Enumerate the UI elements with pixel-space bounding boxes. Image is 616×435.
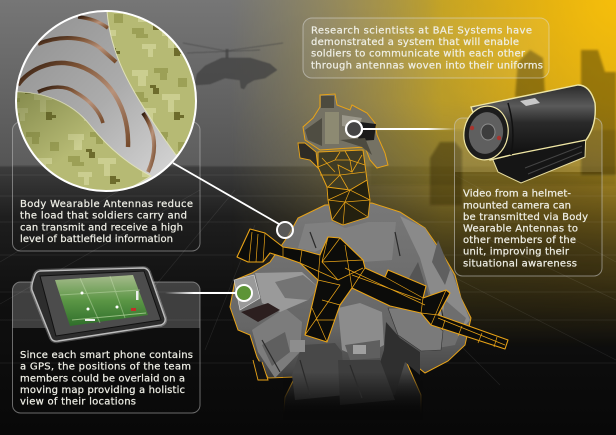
camera [460, 85, 595, 183]
neck mesh [327, 180, 370, 225]
panel: smart phone: moving map providing a holistic [20, 385, 185, 396]
panel: body wearable antennas [12, 122, 200, 251]
ear and chin strap [298, 143, 318, 168]
panel: helmet camera: Wearable Antennas to [463, 223, 578, 234]
panel: helmet camera: unit, improving their [463, 247, 570, 258]
phone on soldier's arm [234, 275, 260, 310]
glove knuckles [275, 275, 318, 300]
panel: helmet camera: other members of the [463, 235, 576, 246]
panel: body wearable antennas: Body Wearable Antennas reduce [20, 199, 193, 210]
panel: smart phone: members could be overlaid on a [20, 373, 185, 384]
helicopter silhouette [183, 43, 283, 89]
camera barrel [471, 85, 595, 160]
rifle silhouette [237, 229, 508, 349]
camouflage flap: lower left [17, 92, 152, 190]
vest and pouch details [252, 216, 470, 420]
panel: top intro: Research scientists at BAE Systems have [311, 25, 532, 36]
camera mount [493, 130, 586, 183]
panel: body wearable antennas: can transmit and receive a high [20, 222, 183, 234]
panel: helmet camera: be transmitted via Body [463, 212, 588, 223]
callout line: phone [165, 292, 237, 294]
smart phone [32, 268, 165, 341]
panel: helmet camera [454, 118, 602, 276]
helmet details [305, 96, 376, 155]
callout line: camera [361, 128, 456, 130]
panel: smart phone: view of their locations [20, 397, 136, 408]
city skyline silhouette [370, 50, 616, 205]
face wireframe [318, 150, 367, 190]
callout line: antennas [173, 163, 279, 224]
callout marker: shoulder [277, 222, 293, 238]
panel: top intro: soldiers to communicate with each other [311, 49, 526, 60]
panel: smart phone: a GPS, the positions of the team [20, 362, 191, 373]
panel: smart phone: Since each smart phone contains [20, 350, 193, 361]
forearm shadow [241, 303, 280, 322]
left glove [255, 272, 318, 312]
flap shading [17, 92, 90, 162]
panel: smart phone [12, 282, 200, 413]
webbing strap [253, 360, 268, 380]
rifle wireframe [237, 229, 508, 349]
panel: top intro [303, 18, 549, 78]
panel: top intro: demonstrated a system that will enable [311, 37, 519, 48]
callout marker: helmet camera [346, 121, 362, 137]
panel: helmet camera: mounted camera can [463, 200, 571, 211]
panel: helmet camera: Video from a helmet- [463, 189, 571, 200]
panel: body wearable antennas: the load that soldiers carry and [20, 211, 187, 222]
panel: helmet camera: situational awareness [463, 258, 577, 269]
wireframe mesh lines [249, 232, 505, 347]
perspective grid [0, 175, 616, 385]
copper antenna arcs [18, 17, 154, 172]
soldier torso [230, 203, 471, 420]
inset circle: antenna fabric detail [15, 10, 197, 192]
phone screen map [55, 275, 148, 326]
panel: top intro: through antennas woven into their uniforms [311, 60, 543, 71]
camera lens [460, 103, 512, 163]
helmet [303, 94, 388, 168]
callout marker: phone [236, 285, 252, 301]
camouflage flap: upper right [107, 5, 200, 155]
soldier figure [230, 94, 471, 420]
right glove [388, 308, 443, 351]
panel: body wearable antennas: level of battlefield information [20, 234, 173, 245]
